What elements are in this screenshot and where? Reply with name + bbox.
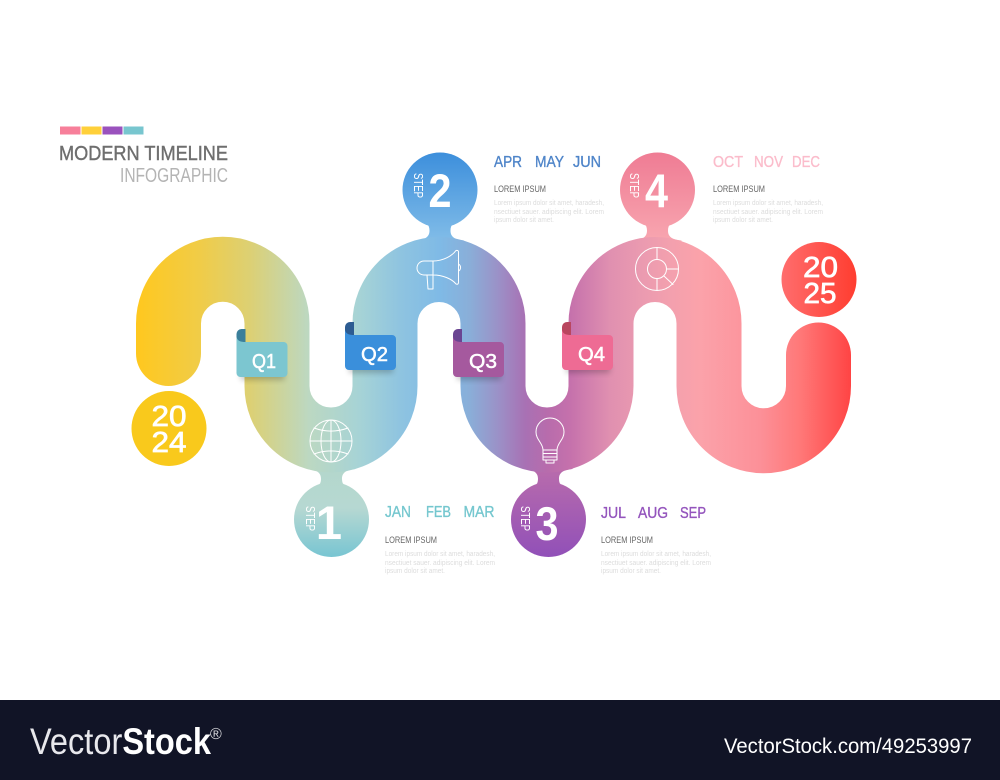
text block: step 1 description: nsectiuet sauer. adipiscing elit. Lorem [385,560,495,567]
text block: step 4 months: NOV [754,154,784,171]
text block: step 4 description: Lorem ipsum dolor sit amet, haradesh, [713,200,823,207]
text block: step 3 description: nsectiuet sauer. adipiscing elit. Lorem [601,560,711,567]
step 3 node: STEP [518,506,532,531]
step 2 node: STEP [411,173,425,198]
text block: step 4 description: nsectiuet sauer. adipiscing elit. Lorem [713,209,823,216]
text block: step 2 description [494,184,604,224]
tag Q3: Q3 [469,351,497,373]
step 1 node [294,460,369,557]
footer banner: ® [210,726,222,743]
tag Q3 [453,329,504,380]
tag Q1: Q1 [252,351,276,373]
text block: step 3 description: LOREM IPSUM [601,535,653,545]
text block: step 1 months: JAN [385,504,411,521]
text block: step 3 description: ipsum dolor sit amet. [601,568,661,575]
text block: step 3 months: JUL [601,505,626,522]
tag Q2: Q2 [361,344,388,366]
text block: step 1 description [385,535,495,575]
step 3 node: 3 [536,497,558,550]
tag Q4: Q4 [578,344,605,366]
icon: globe [310,420,352,462]
text block: step 3 months: SEP [680,505,706,522]
text block: step 3 description: Lorem ipsum dolor sit amet, haradesh, [601,551,711,558]
text block: step 1 description: LOREM IPSUM [385,535,437,545]
text block: step 3 months [601,505,706,522]
winding timeline ribbon [168,269,818,441]
text block: step 2 description: LOREM IPSUM [494,184,546,194]
footer banner: VectorStock [30,721,211,762]
footer banner: VectorStock.com/49253997 [724,735,972,758]
text block: step 3 months: AUG [638,505,668,522]
step 2 node [402,152,478,250]
colour legend bars [60,126,144,134]
text block: step 4 months: OCT [713,154,743,171]
title [59,142,228,187]
step 4 node: STEP [627,173,641,198]
text block: step 2 description: nsectiuet sauer. adipiscing elit. Lorem [494,209,604,216]
footer banner [0,700,1000,780]
text block: step 2 months: APR [494,154,522,171]
step 4 node [620,152,695,250]
text block: step 4 description: LOREM IPSUM [713,184,765,194]
icon: megaphone [417,250,461,289]
year badge 2025 [782,242,856,317]
text block: step 3 description [601,535,711,575]
text block: step 2 months: MAY [535,154,564,171]
year badge 2025: 20 [803,252,838,284]
text block: step 2 months [494,154,601,171]
text block: step 2 description: ipsum dolor sit amet. [494,217,554,224]
text block: step 4 description: ipsum dolor sit amet. [713,217,773,224]
text block: step 1 months: FEB [426,504,451,521]
tag Q1 [236,329,288,380]
year badge 2024 [132,391,206,466]
icon: donut chart [636,248,678,290]
text block: step 1 description: Lorem ipsum dolor sit amet, haradesh, [385,551,495,558]
text block: step 1 months: MAR [464,504,494,521]
text block: step 4 months: DEC [792,154,820,171]
text block: step 4 description [713,184,823,224]
text block: step 1 months [385,504,494,521]
text block: step 2 months: JUN [573,154,601,171]
tag Q4 [562,322,613,373]
year badge 2025: 25 [804,278,836,310]
icon: light bulb [536,418,564,463]
step 3 node [511,460,586,557]
year badge 2024: 24 [152,427,186,459]
step 1 node: 1 [316,496,342,549]
tag Q2 [345,322,396,373]
text block: step 1 description: ipsum dolor sit amet. [385,568,445,575]
step 2 node: 2 [428,164,452,217]
year badge 2024: 20 [152,401,186,433]
text block: step 4 months [713,154,820,171]
title: INFOGRAPHIC [120,164,228,187]
title: MODERN TIMELINE [59,142,228,165]
step 1 node: STEP [303,506,317,531]
step 4 node: 4 [645,164,668,217]
text block: step 2 description: Lorem ipsum dolor sit amet, haradesh, [494,200,604,207]
